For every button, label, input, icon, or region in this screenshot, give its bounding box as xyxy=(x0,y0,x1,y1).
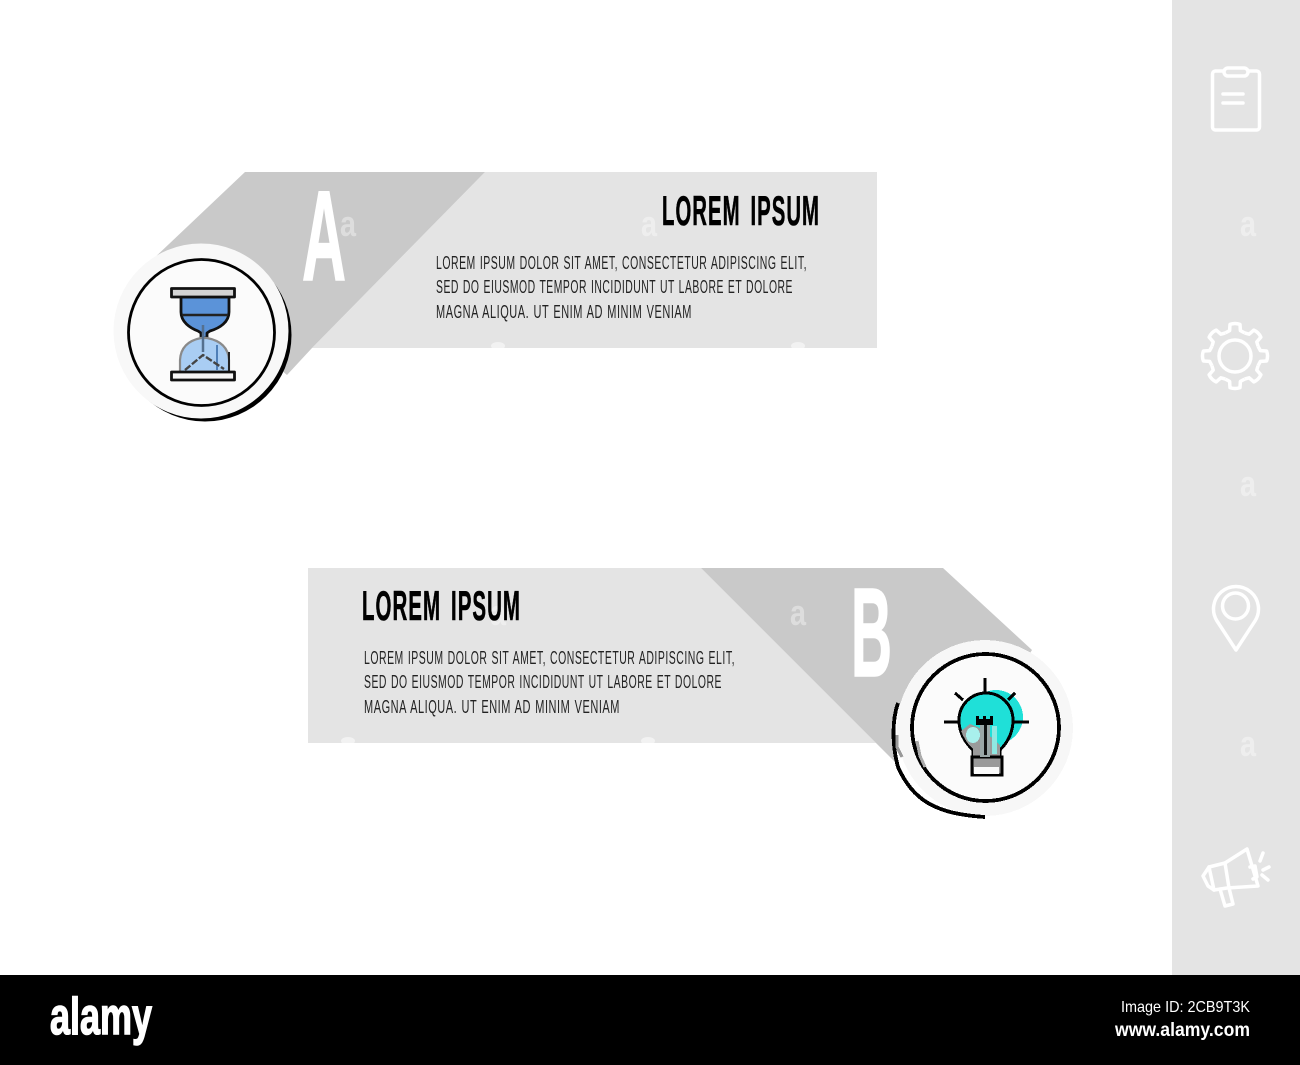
body text A xyxy=(436,253,807,322)
panel: step B xyxy=(308,562,1073,817)
icon: hourglass xyxy=(172,288,234,380)
panel: step A: LOREM IPSUM xyxy=(662,187,820,234)
panel: step B: B xyxy=(851,562,892,703)
icon: gear xyxy=(1202,323,1268,389)
body text B: LOREM IPSUM DOLOR SIT AMET, CONSECTETUR ADIPISCING ELIT, xyxy=(364,648,735,668)
panel: step A: A xyxy=(302,165,346,308)
body text A: SED DO EIUSMOD TEMPOR INCIDIDUNT UT LABORE ET DOLORE xyxy=(436,277,793,297)
icon: light bulb xyxy=(944,678,1029,775)
watermark: sidebar letters: a xyxy=(1240,203,1257,244)
banner A background xyxy=(312,172,877,348)
watermark letters B: a xyxy=(490,592,507,633)
panel: step A xyxy=(114,165,877,422)
body text B: SED DO EIUSMOD TEMPOR INCIDIDUNT UT LABORE ET DOLORE xyxy=(364,672,722,692)
banner A diagonal band xyxy=(150,172,485,375)
panel: step B: LOREM IPSUM xyxy=(362,582,521,629)
watermark letters A: a xyxy=(641,203,658,244)
body text B xyxy=(364,648,735,717)
website: www.alamy.com xyxy=(1114,1020,1250,1041)
image id: Image ID: 2CB9T3K xyxy=(1121,999,1250,1016)
banner B diagonal band xyxy=(701,568,1032,772)
watermark: sidebar letters: a xyxy=(1240,463,1257,504)
logo: alamy: alamy xyxy=(50,988,152,1046)
watermark letters B xyxy=(341,592,807,745)
panel: sidebar xyxy=(1172,0,1300,975)
icon: megaphone xyxy=(1203,849,1269,906)
icon badge A xyxy=(114,244,292,422)
icon: map pin xyxy=(1214,586,1258,650)
banner B background xyxy=(308,568,876,743)
body text B: MAGNA ALIQUA. UT ENIM AD MINIM VENIAM xyxy=(364,697,620,717)
watermark: sidebar letters xyxy=(1240,203,1257,764)
body text A: MAGNA ALIQUA. UT ENIM AD MINIM VENIAM xyxy=(436,302,692,322)
watermark: sidebar letters: a xyxy=(1240,723,1257,764)
watermark letters B: a xyxy=(790,592,807,633)
watermark letters A xyxy=(340,203,805,350)
icon: clipboard xyxy=(1212,68,1260,130)
icon badge B xyxy=(894,640,1073,817)
footer bar xyxy=(0,975,1300,1065)
body text A: LOREM IPSUM DOLOR SIT AMET, CONSECTETUR ADIPISCING ELIT, xyxy=(436,253,807,273)
watermark letters A: a xyxy=(340,203,357,244)
